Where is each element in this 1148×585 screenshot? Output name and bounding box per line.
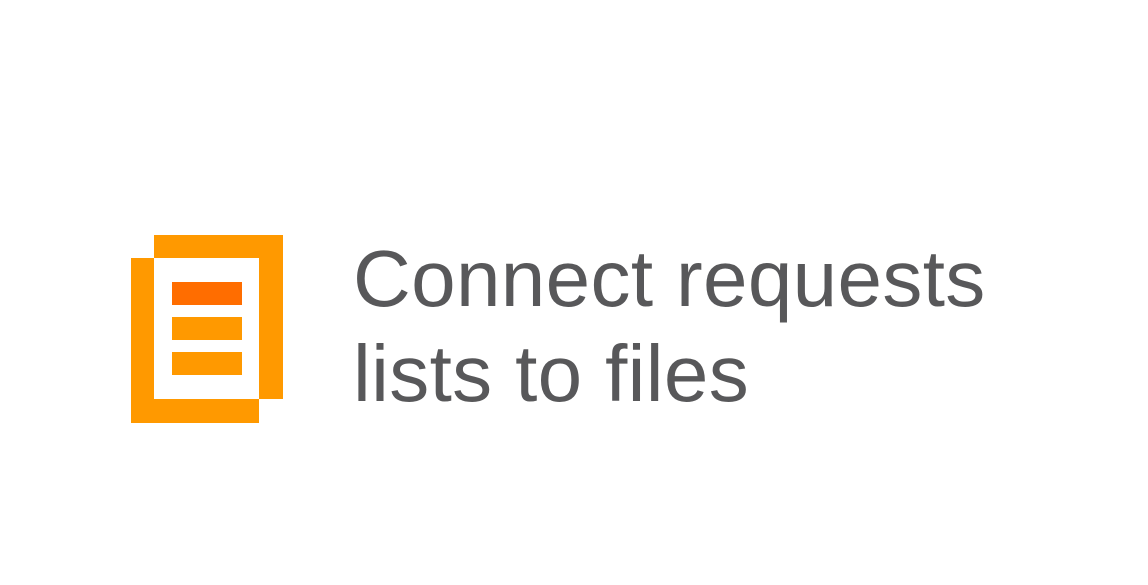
title: [353, 234, 986, 418]
title: Connect requests: [353, 234, 986, 323]
icon: document list: [131, 235, 283, 423]
title: lists to files: [353, 329, 749, 418]
